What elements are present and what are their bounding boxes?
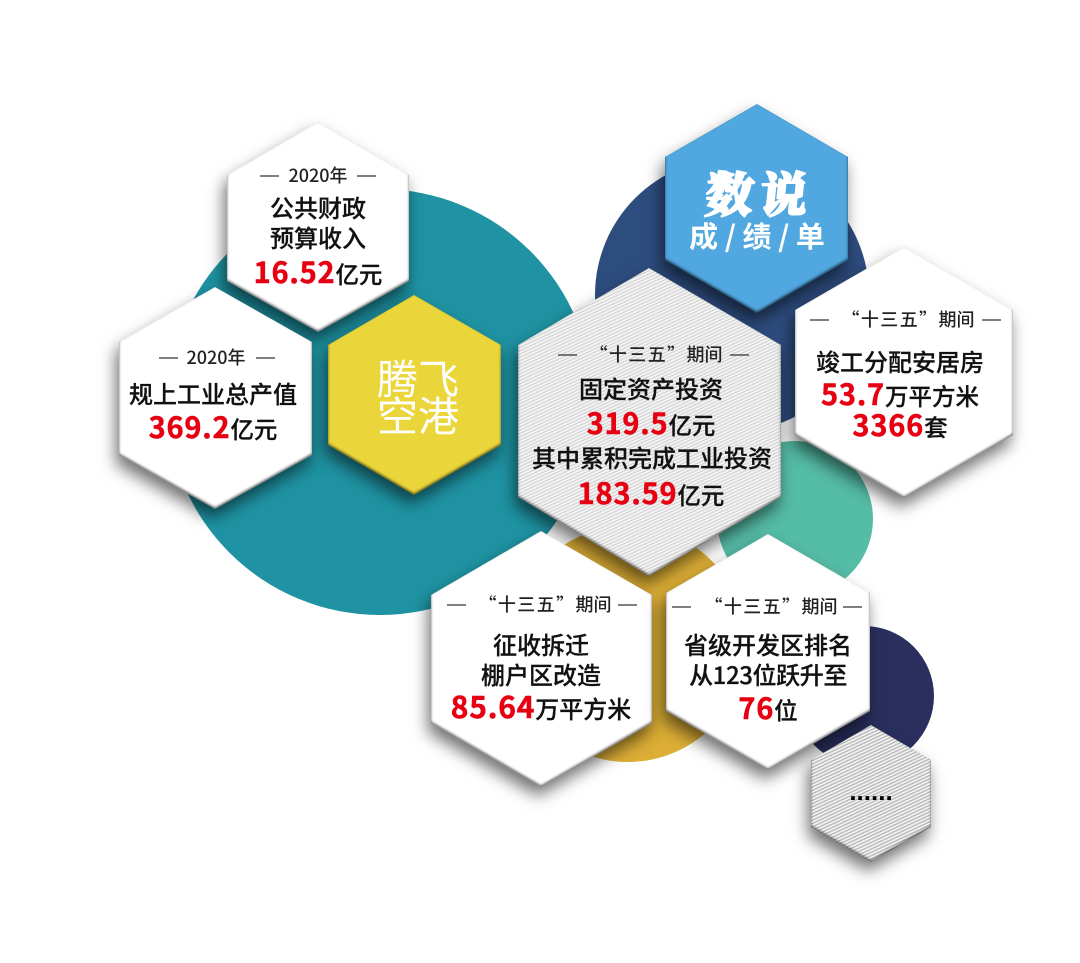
number: 76: 76位 [738,686,798,728]
label: 2020: 2020年 [186,344,246,370]
hexagon: blue title [665,104,848,313]
hexagon panel: industrial output [119,287,312,509]
text: demolition title: 征收拆迁 [493,626,589,661]
text: ranking title: 省级开发区排名 [684,626,852,661]
label: 13th five year period: “十三五”期间 [590,341,722,367]
label: 13th five year period: “十三五”期间 [478,591,612,617]
hexagon panel: fiscal revenue [227,122,409,332]
label: 13th five year period: “十三五”期间 [842,306,974,332]
number: 16.52: 16.52亿元 [254,250,382,292]
text: housing title: 竣工分配安居房 [816,343,984,378]
number: 369.2: 369.2亿元 [149,405,277,447]
hexagon panel: fixed asset investment [518,268,781,576]
title: 空港: 空港 [377,383,459,443]
circle: navy backdrop [794,626,934,766]
number: 319.5: 319.5亿元 [587,401,715,443]
number: 3366: 3366套 [852,403,948,445]
hexagon panel: development zone ranking [666,534,870,770]
text: ellipsis: ...... [849,776,893,806]
subtitle: 成绩单: 成 / 绩 / 单 [689,214,825,256]
label: 13th five year period: “十三五”期间 [704,593,838,619]
hexagon panel: resettlement housing [795,247,1013,498]
hexagon panel: demolition [431,531,652,787]
text: industrial investment title: 其中累积完成工业投资 [532,439,772,474]
title: 数说: 数说 [702,157,817,226]
number: 53.7: 53.7万平方米 [821,372,979,414]
text: fixed asset title: 固定资产投资 [579,370,723,405]
number: 85.64: 85.64万平方米 [451,683,631,727]
text: budget income: 预算收入 [270,219,366,254]
circle: dark blue backdrop [595,158,869,432]
hexagon: ellipsis [811,725,931,862]
circle: teal backdrop [167,189,593,615]
text: industrial output title: 规上工业总产值 [129,375,297,410]
label: 2020: 2020年 [288,162,348,188]
text: rank rise: 从123位跃升至 [689,656,847,691]
number: 183.59: 183.59亿元 [578,471,724,513]
circle: gold backdrop [510,526,746,762]
text: fiscal revenue title: 公共财政 [270,189,366,224]
title: 腾飞: 腾飞 [377,346,459,406]
hexagon: yellow title [328,295,501,495]
text: shantytown renovation: 棚户区改造 [481,656,601,691]
circle: green backdrop [717,441,873,597]
